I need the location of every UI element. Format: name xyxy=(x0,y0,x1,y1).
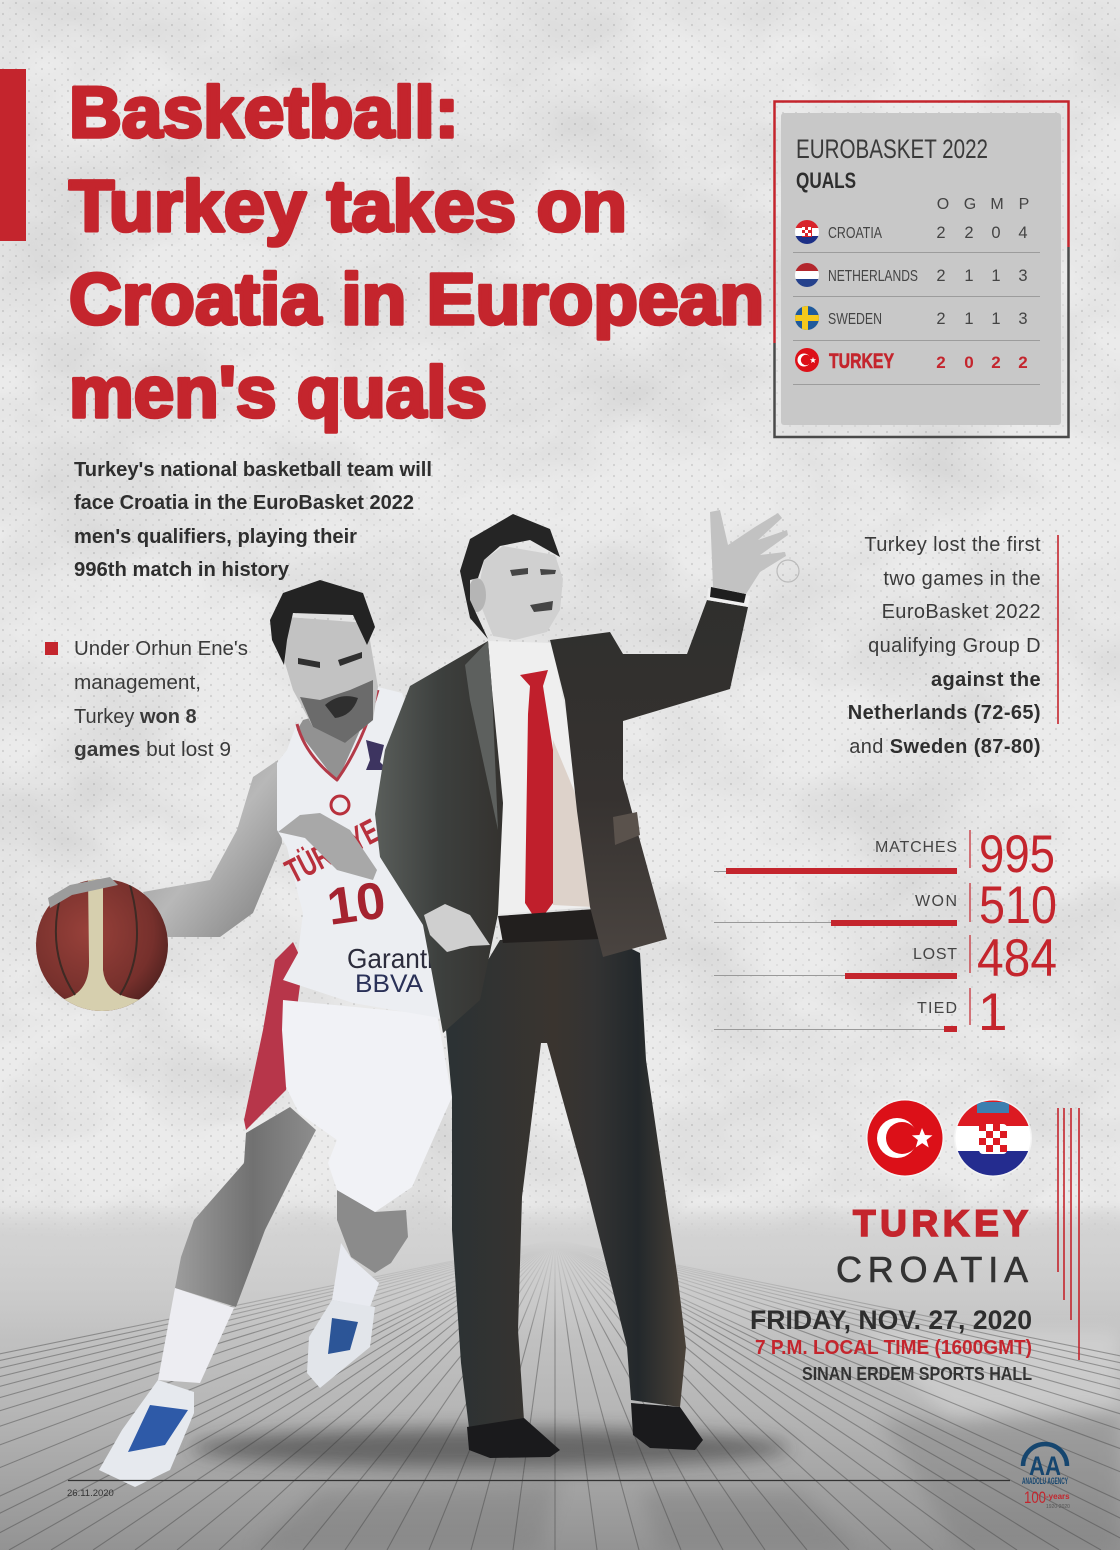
row: Netherlands: 1 xyxy=(964,267,974,285)
title: Basketball: xyxy=(69,73,459,153)
row: Sweden xyxy=(795,306,1028,330)
head xyxy=(477,546,563,640)
watch xyxy=(710,587,746,603)
necktie xyxy=(520,670,553,923)
pants xyxy=(446,935,686,1428)
back shoe laces xyxy=(128,1405,188,1452)
match information: 7 P.M. LOCAL TIME (1600GMT) xyxy=(755,1337,1032,1359)
row: Netherlands: 2 xyxy=(936,267,946,285)
shirt shadow xyxy=(553,740,593,907)
agency logo: 1920-2020 xyxy=(1046,1504,1070,1510)
column headers xyxy=(937,196,1029,213)
shorts xyxy=(282,1000,452,1212)
footer line and date: 26.11.2020 xyxy=(67,1488,114,1499)
shirt xyxy=(488,641,593,914)
column headers: G xyxy=(964,196,976,213)
row: Croatia xyxy=(795,220,1028,244)
jersey text: TÜRKİYE xyxy=(279,812,386,891)
left bullet note: Under Orhun Ene's xyxy=(74,638,248,660)
team flags xyxy=(866,1099,1032,1177)
shirt cuff xyxy=(707,588,750,607)
row: Turkey: 2 xyxy=(1018,353,1028,372)
intro text: men's qualifiers, playing their xyxy=(74,526,357,548)
row: Turkey: 2 xyxy=(936,353,946,372)
jersey text: BBVA xyxy=(355,970,423,998)
coach figure xyxy=(375,510,788,1458)
right note: Turkey lost the first xyxy=(864,534,1041,556)
basketball xyxy=(36,875,168,1016)
column headers: O xyxy=(937,196,949,213)
jacket right panel and sleeve xyxy=(550,600,748,957)
right note: and Sweden (87-80) xyxy=(849,736,1041,758)
stat: matches: 995 xyxy=(979,825,1055,884)
column headers: M xyxy=(990,196,1004,213)
head xyxy=(285,617,378,743)
row: Sweden: SWEDEN xyxy=(828,311,882,328)
intro text: Turkey's national basketball team will xyxy=(74,459,432,481)
accent bar xyxy=(0,69,26,241)
back shoe xyxy=(99,1380,194,1487)
jersey collar xyxy=(297,690,378,780)
flag: Turkey xyxy=(866,1099,944,1177)
stats chart xyxy=(714,825,1057,1042)
front sock xyxy=(332,1243,379,1307)
agency logo: ANADOLU AGENCY xyxy=(1022,1476,1068,1486)
row: Croatia: 4 xyxy=(1018,224,1028,242)
facial features xyxy=(510,568,556,612)
jersey text: 10 xyxy=(324,871,389,937)
row: Sweden: 2 xyxy=(936,310,946,328)
lapel xyxy=(465,641,498,830)
club crest xyxy=(366,740,388,770)
left bullet note: games but lost 9 xyxy=(74,739,231,761)
stat: tied: TIED xyxy=(917,1000,957,1017)
stat: lost xyxy=(845,929,1057,988)
row: Turkey: 2 xyxy=(991,353,1001,372)
flag: Croatia xyxy=(954,1099,1032,1177)
row: Sweden: 1 xyxy=(964,310,974,328)
stat: matches: MATCHES xyxy=(875,839,957,856)
fingers on ball xyxy=(48,877,118,908)
match information: TURKEY xyxy=(853,1203,1028,1244)
dribbling arm xyxy=(143,760,282,937)
right note: two games in the xyxy=(883,568,1041,590)
table heading: EUROBASKET 2022 xyxy=(796,134,988,164)
row: Croatia: 2 xyxy=(936,224,946,242)
forearm and fingers over jersey xyxy=(278,813,377,880)
row: Netherlands xyxy=(795,263,1028,287)
row: Turkey xyxy=(795,348,1028,373)
right note xyxy=(848,534,1058,758)
jersey text xyxy=(279,812,433,998)
left bullet note: Turkey won 8 xyxy=(74,706,197,728)
right note: against the xyxy=(931,669,1041,691)
title: Croatia in European xyxy=(69,260,764,340)
stat: won: WON xyxy=(915,893,957,910)
front shoe xyxy=(307,1300,375,1388)
jacket left panel and sleeve xyxy=(375,641,503,1033)
title xyxy=(69,73,764,433)
table frame xyxy=(774,102,1068,437)
match information: FRIDAY, NOV. 27, 2020 xyxy=(750,1305,1032,1335)
stat: matches xyxy=(726,825,1055,884)
agency logo: AA xyxy=(1029,1451,1061,1481)
hair xyxy=(270,580,375,665)
row: Sweden: 3 xyxy=(1018,310,1028,328)
title: men's quals xyxy=(69,353,487,433)
row: Turkey: TURKEY xyxy=(829,350,894,373)
row: Netherlands: NETHERLANDS xyxy=(828,268,918,285)
eyes and mouth xyxy=(298,652,362,718)
raised hand xyxy=(710,510,788,594)
right note: qualifying Group D xyxy=(868,635,1041,657)
table panel xyxy=(781,113,1061,425)
right shoe xyxy=(631,1403,703,1450)
row: Croatia: 0 xyxy=(991,224,1001,242)
player figure xyxy=(36,580,452,1487)
stat: won: 510 xyxy=(979,876,1057,935)
match information xyxy=(750,1108,1079,1384)
intro text: 996th match in history xyxy=(74,559,290,581)
back leg xyxy=(175,1107,316,1307)
table heading: QUALS xyxy=(796,168,856,193)
row: Netherlands: 3 xyxy=(1018,267,1028,285)
front shoe laces xyxy=(328,1318,358,1354)
intro text xyxy=(74,459,432,581)
stat: tied: 1 xyxy=(978,983,1007,1042)
beard xyxy=(300,680,373,743)
row: Croatia: 2 xyxy=(964,224,974,242)
hair xyxy=(460,514,560,639)
right note: Netherlands (72-65) xyxy=(848,702,1041,724)
agency logo: -years xyxy=(1046,1492,1070,1501)
match information: CROATIA xyxy=(836,1249,1028,1290)
neck xyxy=(297,690,378,782)
front leg xyxy=(337,1190,408,1273)
belt xyxy=(498,909,600,943)
stat: won xyxy=(831,876,1057,935)
row: Turkey: 0 xyxy=(964,353,974,372)
standings table xyxy=(774,102,1068,437)
pocket flap xyxy=(613,812,640,845)
title: Turkey takes on xyxy=(69,167,627,247)
stat: tied xyxy=(917,983,1007,1042)
stat: lost: LOST xyxy=(913,946,957,963)
row: Netherlands: 1 xyxy=(991,267,1001,285)
shorts red side xyxy=(244,942,303,1130)
jersey crescent badge xyxy=(331,796,349,814)
right note: EuroBasket 2022 xyxy=(882,601,1041,623)
row: Sweden: 1 xyxy=(991,310,1001,328)
ear xyxy=(468,578,486,612)
match information: SINAN ERDEM SPORTS HALL xyxy=(802,1364,1032,1384)
agency logo: 100 xyxy=(1024,1488,1046,1507)
agency logo xyxy=(1022,1444,1070,1510)
left shoe xyxy=(467,1418,560,1458)
row: Croatia: CROATIA xyxy=(828,225,882,242)
column headers: P xyxy=(1019,196,1029,213)
hand at side xyxy=(424,904,490,952)
table heading xyxy=(796,134,988,193)
stat: lost: 484 xyxy=(977,929,1057,988)
intro text: face Croatia in the EuroBasket 2022 xyxy=(74,492,414,514)
jersey text: Garanti xyxy=(347,943,433,974)
back sock xyxy=(158,1288,234,1383)
left bullet note: management, xyxy=(74,672,201,694)
left bullet note xyxy=(45,638,248,761)
jersey xyxy=(277,687,440,1018)
